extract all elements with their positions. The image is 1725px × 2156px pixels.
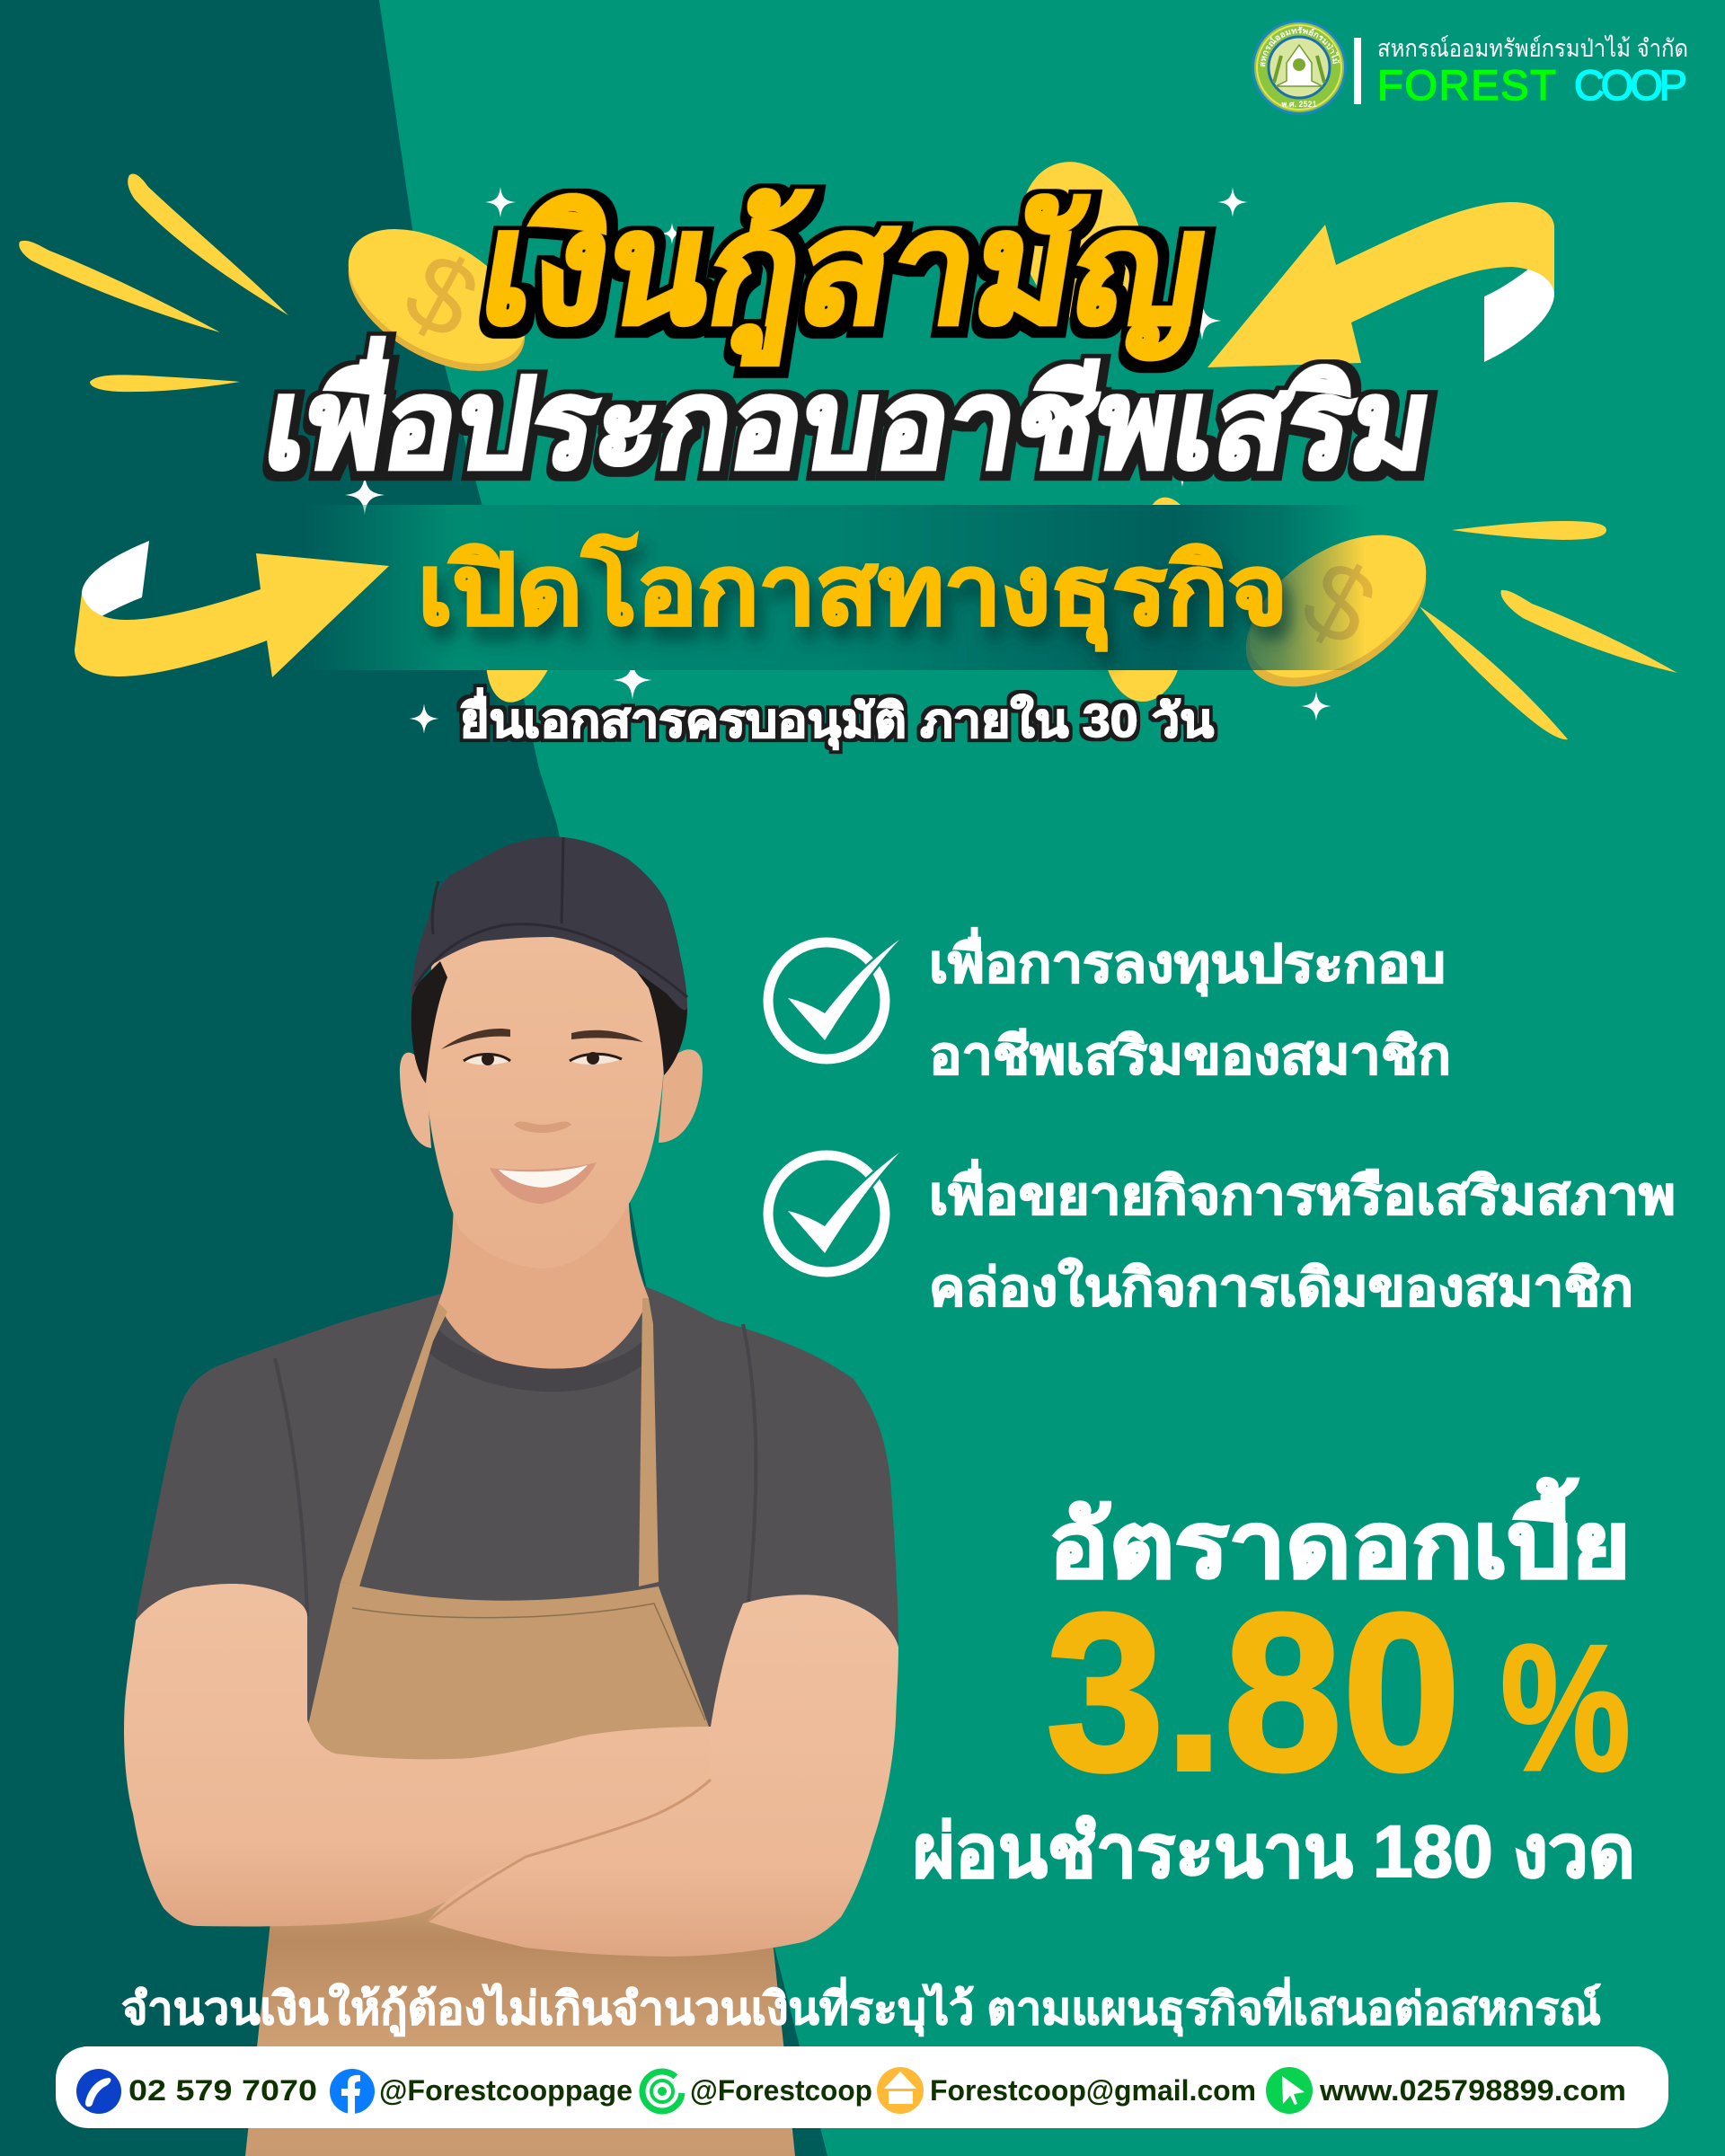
phone icon <box>76 2069 121 2114</box>
item 2 line 1: เพื่อขยายกิจการหรือเสริมสภาพ <box>929 1159 1676 1225</box>
decorative rays left <box>19 173 288 392</box>
hair <box>411 961 687 1083</box>
item 2 line 2: คล่องในกิจการเดิมของสมาชิก <box>929 1257 1633 1317</box>
coin right with dollar sign: $ <box>1285 535 1393 670</box>
face <box>425 934 664 1268</box>
nose <box>514 1121 571 1133</box>
arrow lower left <box>75 541 389 677</box>
email icon <box>877 2067 924 2114</box>
person: man in cap and apron <box>124 836 898 2156</box>
logo emblem <box>1252 20 1347 115</box>
collar <box>428 1328 643 1392</box>
right upper arm and forearm <box>428 1595 898 1957</box>
smile <box>490 1162 597 1204</box>
eyebrows <box>441 1029 643 1049</box>
coin left with dollar sign: $ <box>387 228 496 363</box>
phone number: 02 579 7070 <box>128 2074 317 2107</box>
arrow top right <box>1208 202 1554 367</box>
facebook icon <box>330 2069 375 2114</box>
coin right with dollar sign <box>1220 506 1452 717</box>
sleeve seams <box>275 1324 756 1616</box>
contact bar <box>56 2046 1668 2128</box>
coin upper right, behind title <box>1000 146 1163 340</box>
lower apron <box>245 1707 795 2156</box>
logo <box>1252 20 1688 115</box>
band behind subtitle <box>305 505 1366 670</box>
arm crease <box>428 1780 711 1922</box>
ears <box>400 1053 431 1148</box>
cap <box>411 836 687 1010</box>
email address: Forestcoop@gmail.com <box>930 2074 1256 2107</box>
teeth <box>499 1165 588 1188</box>
logo divider <box>1354 38 1361 104</box>
website icon <box>1266 2067 1313 2114</box>
facebook handle: @Forestcooppage <box>379 2074 632 2107</box>
line handle: @Forestcoop <box>690 2074 872 2107</box>
background: dark teal diagonal panel <box>0 0 827 2156</box>
subtitle on band: เปิดโอกาสทางธุรกิจ <box>418 534 1287 651</box>
check item 2 <box>768 1153 1676 1317</box>
neck <box>438 1204 649 1374</box>
cap brim edge <box>415 837 687 997</box>
decorative rays right <box>1420 521 1677 739</box>
title line 2: เพื่อประกอบอาชีพเสริม <box>256 337 1445 494</box>
item 1 line 1: เพื่อการลงทุนประกอบ <box>929 927 1446 997</box>
left upper arm and forearm <box>124 1584 711 1926</box>
check item 1 <box>768 927 1451 1085</box>
t-shirt <box>136 1286 898 1729</box>
logo emblem: พ.ศ. 2521 <box>1281 100 1317 109</box>
item 1 line 2: อาชีพเสริมของสมาชิก <box>929 1027 1451 1085</box>
apron stitching <box>352 1604 705 1720</box>
interest rate number: 3.80 <box>1046 1567 1461 1817</box>
sparkles <box>345 187 1331 734</box>
approval note: ยื่นเอกสารครบอนุมัติ ภายใน 30 วัน <box>460 688 1214 750</box>
interest rate number: % <box>1500 1608 1631 1808</box>
logo COOP: COOP <box>1574 61 1687 109</box>
coin pieces around band <box>472 490 1227 711</box>
installment text: ผ่อนชำระนาน 180 งวด <box>913 1811 1635 1893</box>
logo thai name: สหกรณ์ออมทรัพย์กรมป่าไม้ จำกัด <box>1377 34 1688 62</box>
title line 1: เงินกู้สามัญ <box>469 181 1217 365</box>
coin left with dollar sign <box>325 201 548 399</box>
check icon 2 <box>768 1153 899 1272</box>
website address: www.025798899.com <box>1319 2074 1626 2107</box>
logo emblem: สหกรณ์ออมทรัพย์กรมป่าไม้ <box>1260 27 1340 66</box>
eyes <box>464 1052 622 1065</box>
apron straps <box>341 1298 659 1586</box>
interest heading: อัตราดอกเบี้ย <box>1048 1478 1631 1596</box>
apron bib <box>307 1582 710 1729</box>
loan condition note: จำนวนเงินให้กู้ต้องไม่เกินจำนวนเงินที่ระบุไว้ ตามแผนธุรกิจที่เสนอต่อสหกรณ์ <box>121 1977 1601 2037</box>
logo FOREST: FOREST <box>1377 61 1556 109</box>
line icon <box>641 2070 684 2113</box>
check icon 1 <box>768 940 899 1059</box>
